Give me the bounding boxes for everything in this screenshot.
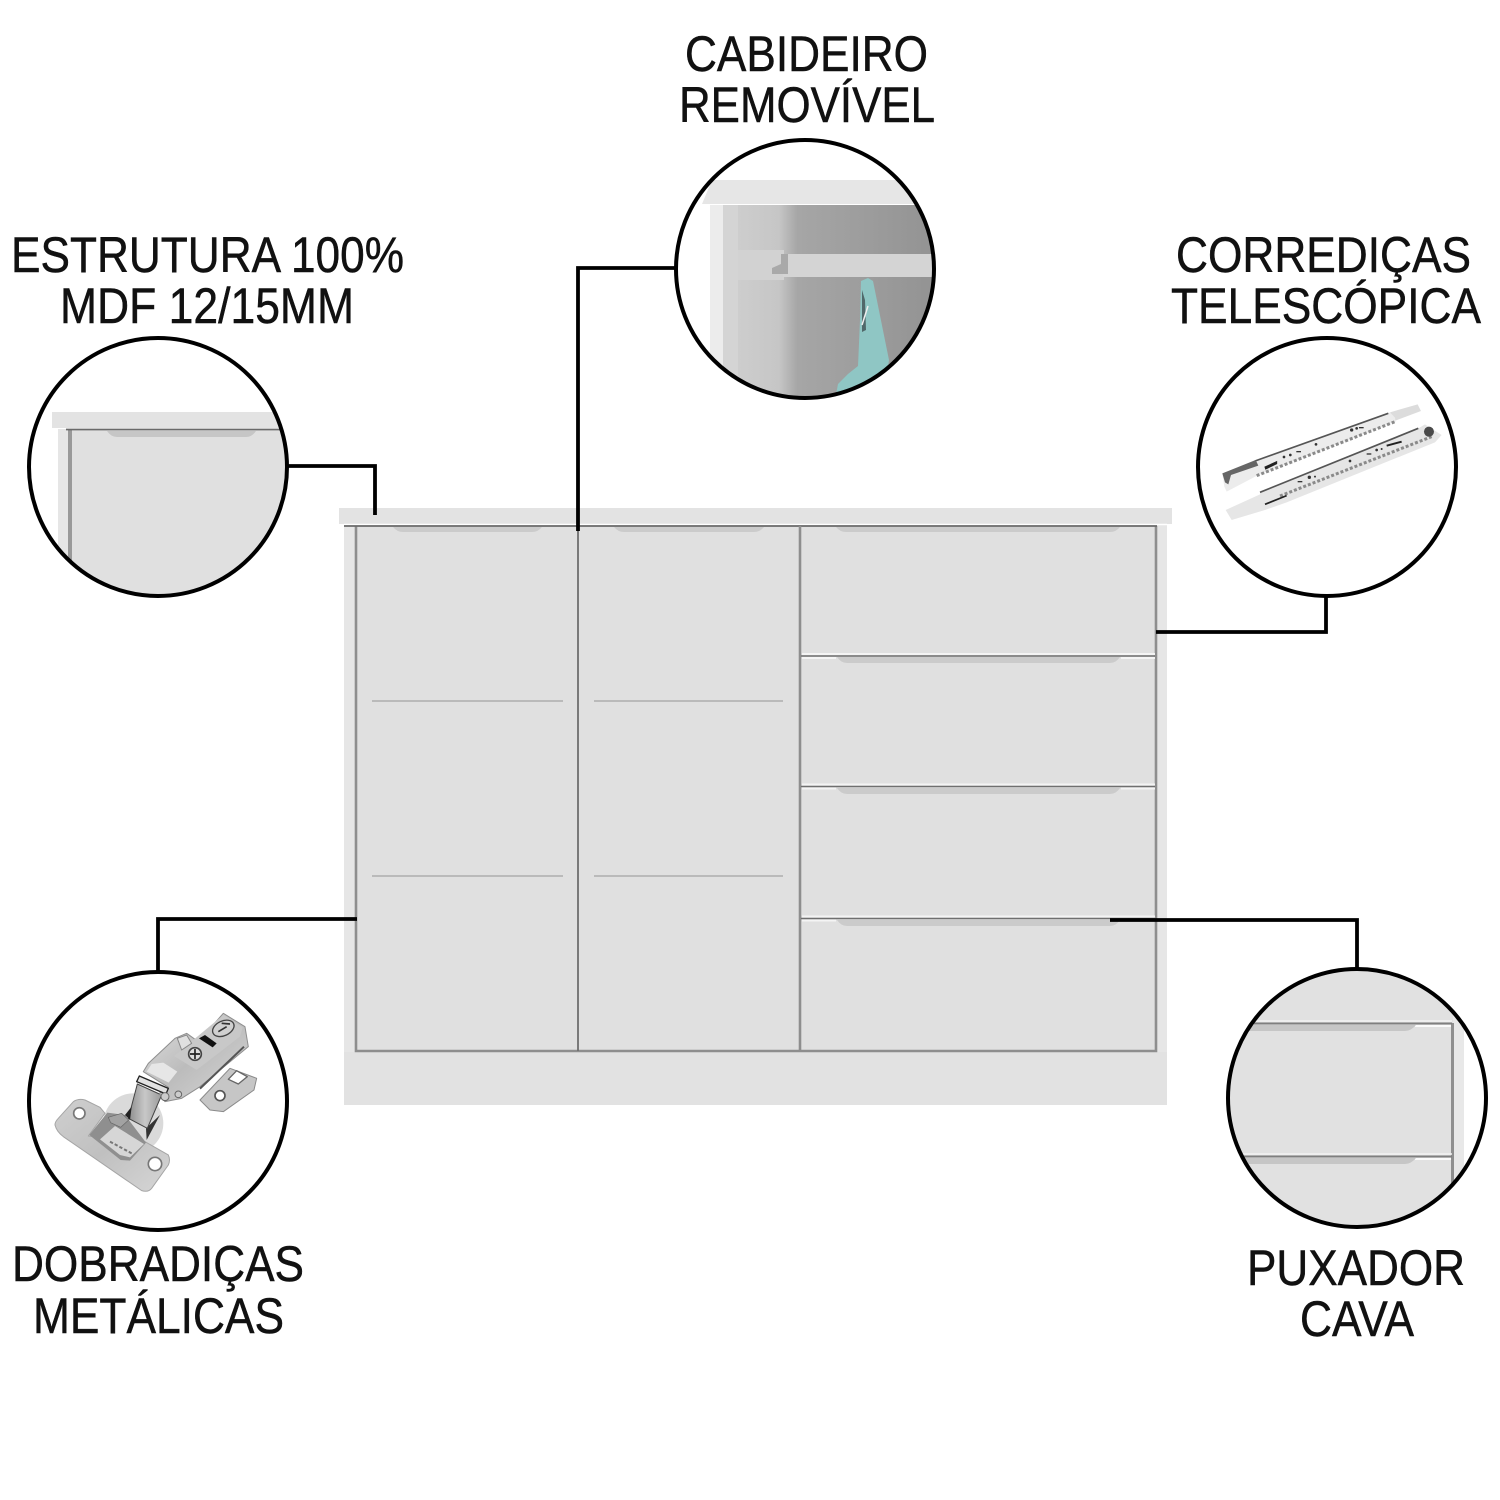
- mounting disc: [103, 1093, 163, 1153]
- connector: puxador: [1110, 920, 1357, 968]
- recessed handles: [393, 527, 1120, 926]
- heading: dobradiças metálicas: METÁLICAS: [33, 1288, 284, 1344]
- furniture top: [339, 508, 1172, 524]
- heading: dobradiças metálicas: DOBRADIÇAS: [12, 1236, 304, 1292]
- door and drawer fronts: [356, 526, 1156, 1051]
- heading: estrutura 100% MDF: ESTRUTURA 100%: [11, 227, 404, 283]
- hinge arm: [128, 1084, 162, 1128]
- hinge cup: [89, 1113, 146, 1161]
- heading: cabideiro removível: [679, 26, 935, 133]
- drawer highlights: [802, 654, 1155, 920]
- heading: corrediças telescópica: CORREDIÇAS: [1176, 227, 1471, 283]
- drawer separators: [801, 656, 1155, 918]
- teal garment: [836, 278, 889, 395]
- detail circle: recessed handle: [1228, 969, 1488, 1233]
- mounting bracket: [200, 1068, 257, 1112]
- heading: puxador cava: CAVA: [1300, 1291, 1415, 1347]
- detail circle: telescopic slides: [1198, 338, 1456, 596]
- detail circle: removable hanging rail: [676, 140, 940, 400]
- connector: dobradiças: [158, 919, 357, 972]
- door divider: [577, 526, 579, 1051]
- heading: estrutura 100% MDF: MDF 12/15MM: [60, 278, 354, 334]
- heading: corrediças telescópica: [1171, 227, 1482, 334]
- lower slide rail: [1226, 424, 1442, 520]
- heading: dobradiças metálicas: [12, 1236, 304, 1344]
- hinge body: [143, 1013, 248, 1102]
- doors and drawers divider: [799, 526, 801, 1051]
- connector: corrediças: [1156, 597, 1326, 632]
- heading: cabideiro removível: REMOVÍVEL: [679, 77, 935, 133]
- connector: estrutura: [288, 466, 375, 515]
- detail circle: furniture top corner: [29, 338, 292, 599]
- upper slide rail: [1390, 404, 1421, 421]
- connector: cabideiro: [578, 268, 675, 531]
- heading: cabideiro removível: CABIDEIRO: [685, 26, 928, 82]
- heading: puxador cava: PUXADOR: [1247, 1240, 1465, 1296]
- heading: puxador cava: [1247, 1240, 1465, 1347]
- strap: [137, 1076, 168, 1094]
- furniture body: [344, 524, 1167, 1105]
- heading: estrutura 100% MDF: [11, 227, 404, 334]
- door panel grooves: [372, 701, 783, 876]
- detail circle: metal hinge: [29, 972, 287, 1230]
- furniture: sideboard front view: [339, 508, 1172, 1105]
- door plate: [55, 1099, 169, 1191]
- furniture base: [344, 1052, 1167, 1105]
- hanging rail: [783, 254, 938, 277]
